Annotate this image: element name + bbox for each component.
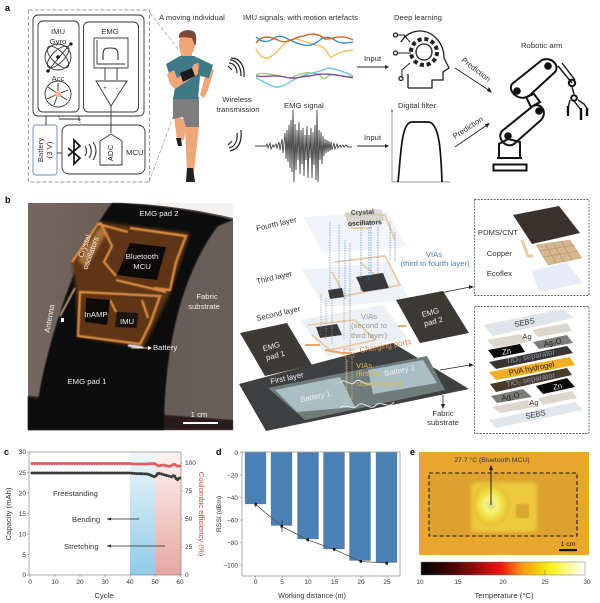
exploded view labels: pad 1 <box>265 349 286 362</box>
inset: battery layers: TiO₂ separator <box>505 370 556 389</box>
inset: battery layers: SEBS <box>514 316 535 329</box>
inset: battery layers: Ag <box>522 332 532 341</box>
panel e: thermal image <box>410 447 591 600</box>
exploded view labels: MCU <box>359 282 378 293</box>
chart: cycling performance: 50 <box>185 516 193 523</box>
icons: wireless waves <box>228 58 244 151</box>
chart: RSSI bars: 5 <box>280 579 284 586</box>
colour bar: Temperature (°C) <box>474 591 534 600</box>
photo labels: substrate <box>188 302 220 311</box>
heading: robotic arm: Robotic arm <box>521 41 562 50</box>
panel label c: c <box>4 447 9 457</box>
chart: cycling performance: 100 <box>185 460 196 467</box>
chart: RSSI bars: 20 <box>357 579 365 586</box>
colour bar: 20 <box>499 579 507 586</box>
title: A moving individual: A moving individual <box>159 13 225 22</box>
chart: RSSI bars: −100 <box>223 562 238 570</box>
panel label e: e <box>410 447 415 457</box>
inset: battery layers: Zn <box>501 346 512 357</box>
chart: cycling performance: 10 <box>51 579 59 586</box>
chart: cycling performance: 20 <box>76 579 84 586</box>
panel c: capacity and coulombic efficiency <box>4 447 206 600</box>
panel d: RSSI vs working distance <box>216 447 400 600</box>
zoom guide lines <box>149 13 193 182</box>
panel label b: b <box>5 195 11 205</box>
chart: cycling performance: 20 <box>19 490 26 498</box>
panel b: device photo and exploded view <box>5 195 589 434</box>
thermal image: 27.7 °C (Bluetooth MCU) <box>454 456 530 464</box>
photo labels: EMG pad 2 <box>140 209 178 218</box>
chart: cycling performance: Bending <box>72 515 100 524</box>
thermal image <box>419 452 589 555</box>
label: wireless transmission <box>216 95 260 114</box>
arrow: input to deep learning: Input <box>364 54 382 63</box>
chart: cycling performance: 0 <box>22 572 26 579</box>
inset: battery layers: TiO₂ separator <box>505 347 556 366</box>
chart: cycling performance: 25 <box>185 544 193 551</box>
exploded view labels: Fabric <box>432 409 454 418</box>
photo labels: 1 cm <box>191 410 207 419</box>
panel label a: a <box>5 3 11 13</box>
arrow: prediction upper: Prediction <box>460 55 492 84</box>
photo labels: MCU <box>133 262 151 271</box>
chart: cycling performance: 60 <box>176 579 184 586</box>
chart: cycling performance: 0 <box>28 579 32 586</box>
chart: RSSI bars <box>216 450 400 600</box>
label: wireless transmission: Wireless <box>222 95 252 104</box>
block diagram labels: Battery <box>36 138 45 162</box>
exploded view labels: third layer) <box>351 331 388 340</box>
exploded view labels: (first to <box>356 369 380 378</box>
heading: digital filter: Digital filter <box>398 101 436 110</box>
block diagram labels: ADC <box>106 144 115 161</box>
chart: cycling performance: Coulombic efficiency (%) <box>197 472 206 557</box>
inset: battery layers: SEBS <box>525 408 546 421</box>
exploded layer stack <box>239 209 469 431</box>
colour bar <box>416 562 591 600</box>
arrow: prediction upper <box>455 55 492 93</box>
colour bar: 15 <box>454 579 462 586</box>
exploded view labels: Battery 1 <box>299 389 331 404</box>
photo labels: EMG pad 1 <box>68 377 106 386</box>
chart: cycling performance: 30 <box>101 579 109 586</box>
exploded view labels: VIAs <box>361 312 377 321</box>
block diagram labels <box>36 27 144 162</box>
inset: battery layers <box>474 306 589 434</box>
block diagram of the wearable <box>28 10 150 182</box>
block diagram labels: − <box>115 86 119 92</box>
chart: RSSI bars: −60 <box>227 518 238 524</box>
chart: cycling performance: 15 <box>19 511 26 518</box>
chart: RSSI bars: 10 <box>304 579 312 586</box>
inset: battery layers: Ag₂O <box>501 390 520 403</box>
arrow: prediction lower <box>451 115 490 147</box>
chart: RSSI bars: −20 <box>227 472 238 480</box>
icon: deep learning head with gear <box>394 31 449 88</box>
block diagram labels: EMG <box>101 27 119 36</box>
exploded view labels: Charging ports <box>359 337 412 355</box>
block diagram labels: (3 V) <box>45 141 54 158</box>
arrow: input to digital filter: Input <box>364 133 382 142</box>
photo labels: oscillators <box>81 235 101 271</box>
arrow: input to deep learning <box>357 54 389 69</box>
photo labels: IMU <box>120 317 134 326</box>
exploded view labels: Crystal <box>351 209 374 217</box>
block diagram labels: Gyro <box>50 37 66 46</box>
chart: cycling performance: 50 <box>151 579 159 586</box>
inset: EMG pad layers <box>474 200 589 296</box>
chart: RSSI bars: 15 <box>331 579 338 586</box>
inset: battery layers: Ag₂O <box>543 336 562 349</box>
arrow: input to digital filter <box>357 133 389 148</box>
exploded view labels: second layer) <box>356 379 403 388</box>
chart: cycling performance: 25 <box>19 470 26 477</box>
chart: cycling performance: Cycle <box>94 591 114 600</box>
exploded view labels: IMU <box>330 292 340 298</box>
exploded view labels: EMG <box>421 306 440 319</box>
photo labels: Battery <box>153 343 178 352</box>
chart: RSSI bars: −80 <box>227 540 238 547</box>
exploded view labels: VIAs <box>356 361 372 370</box>
exploded view labels: pad 2 <box>423 315 444 328</box>
exploded view labels: (second to <box>351 321 387 330</box>
chart: cycling performance: 30 <box>19 449 26 456</box>
inset: EMG pad layers: PDMS/CNT <box>478 228 518 237</box>
exploded view labels: VIAs <box>426 250 442 259</box>
exploded view labels: EMG <box>262 340 281 353</box>
chart: RSSI bars: 0 <box>254 579 258 586</box>
exploded view labels: (third to fourth layer) <box>400 259 470 268</box>
inset: battery layers: Zn <box>552 381 563 392</box>
chart: cycling performance: 5 <box>22 552 26 559</box>
panel a: system overview <box>5 3 588 182</box>
label: wireless transmission: transmission <box>216 105 260 114</box>
exploded view labels: substrate <box>427 418 459 427</box>
exploded view labels: First layer <box>270 370 305 386</box>
heading: deep learning: Deep learning <box>394 13 442 22</box>
chart: cycling performance: 40 <box>126 579 134 586</box>
photo of device on fabric <box>28 203 233 430</box>
arrow: prediction lower: Prediction <box>451 115 485 141</box>
colour bar: 25 <box>541 579 549 586</box>
chart: RSSI bars: RSSI (dBm) <box>216 496 223 532</box>
block diagram labels: + <box>103 86 107 92</box>
inset: EMG pad layers: Copper <box>487 249 512 258</box>
photo labels: Fabric <box>196 292 218 301</box>
chart: RSSI bars: 0 <box>234 450 238 457</box>
photo labels: Crystal <box>76 233 93 259</box>
exploded view labels <box>255 209 474 427</box>
chart: cycling performance: 10 <box>19 532 26 538</box>
chart: cycling performance: 0 <box>185 572 189 579</box>
exploded view labels: Battery 2 <box>383 363 415 378</box>
chart: digital filter response <box>391 108 450 182</box>
colour bar: 10 <box>416 579 424 586</box>
chart: cycling performance: Freestanding <box>53 489 98 498</box>
block diagram labels: Acc <box>52 74 65 83</box>
thermal image: 1 cm <box>561 541 576 548</box>
chart: cycling performance: Stretching <box>64 542 99 551</box>
exploded view labels: Third layer <box>255 269 293 286</box>
panel label d: d <box>216 447 222 457</box>
chart: RSSI bars: 25 <box>383 579 391 586</box>
inset: EMG pad layers: Ecoflex <box>487 269 512 278</box>
chart: EMG signal trace <box>255 101 352 182</box>
inset: battery layers: Ag <box>529 398 539 407</box>
exploded view labels: oscillators <box>348 219 382 228</box>
photo labels <box>43 209 220 424</box>
inset: battery layers: PVA hydrogel <box>508 360 555 377</box>
exploded view labels: Second layer <box>255 304 302 323</box>
chart: IMU signal traces <box>256 34 353 87</box>
icon: robotic arm <box>494 59 588 170</box>
exploded view labels: InAMP <box>320 329 340 336</box>
exploded view labels: Fourth layer <box>255 215 298 233</box>
chart: cycling performance: Capacity (mAh) <box>4 487 13 540</box>
chart: RSSI bars: −40 <box>227 495 238 502</box>
chart: EMG signal trace: EMG signal <box>284 101 324 110</box>
block diagram labels: MCU <box>126 148 144 157</box>
chart: cycling performance: 75 <box>185 488 193 495</box>
heading: IMU signals: IMU signals. with motion artefacts <box>243 13 358 22</box>
chart: cycling performance <box>4 449 206 600</box>
colour bar: 30 <box>583 579 591 586</box>
photo labels: Antenna <box>43 303 57 333</box>
photo labels: InAMP <box>84 310 108 319</box>
figure: moving individual <box>166 30 214 182</box>
chart: RSSI bars: Working distance (m) <box>278 591 346 600</box>
block diagram labels: IMU <box>51 27 65 36</box>
photo labels: Bluetooth <box>126 252 158 261</box>
